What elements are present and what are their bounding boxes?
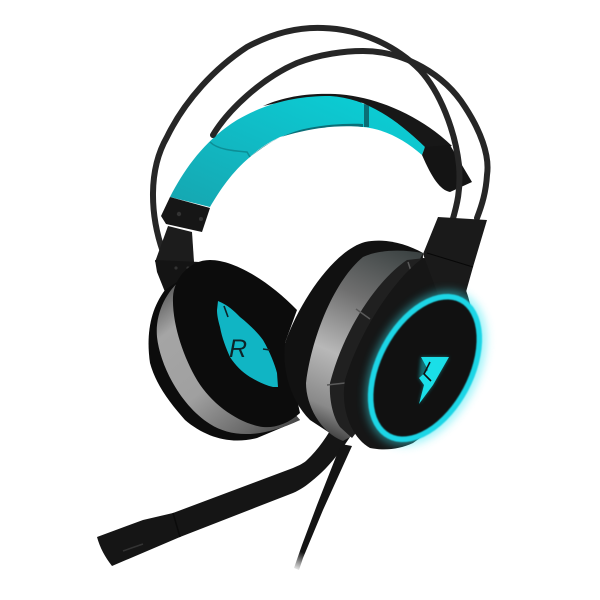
right cup logo glow — [419, 357, 449, 404]
right cup dark inner band — [330, 258, 425, 438]
right earcup — [284, 217, 504, 459]
left ear pad — [173, 260, 300, 427]
headband teal padding — [170, 96, 425, 207]
left cup silver band — [157, 278, 300, 434]
outer headband wire — [153, 28, 460, 252]
inner headband wire — [213, 51, 488, 218]
audio cable — [294, 444, 352, 570]
left earcup — [149, 260, 300, 441]
headband black rim and underside — [263, 94, 452, 149]
right cup logo — [419, 357, 449, 404]
right cup ring glow — [348, 277, 504, 459]
left arm yoke — [155, 197, 210, 292]
right headband slider — [422, 145, 472, 192]
right cup silver band — [306, 251, 423, 441]
left ear pad teal inner — [217, 301, 278, 387]
left cup shell — [149, 280, 300, 441]
microphone boom — [97, 422, 350, 566]
right cup ring light — [348, 278, 502, 458]
right arm block — [423, 217, 487, 300]
right cup back pad — [284, 241, 423, 443]
right cup face — [344, 258, 473, 449]
letter R: R — [229, 335, 247, 363]
right cup inner disc — [350, 280, 500, 456]
tick marks — [224, 306, 270, 350]
